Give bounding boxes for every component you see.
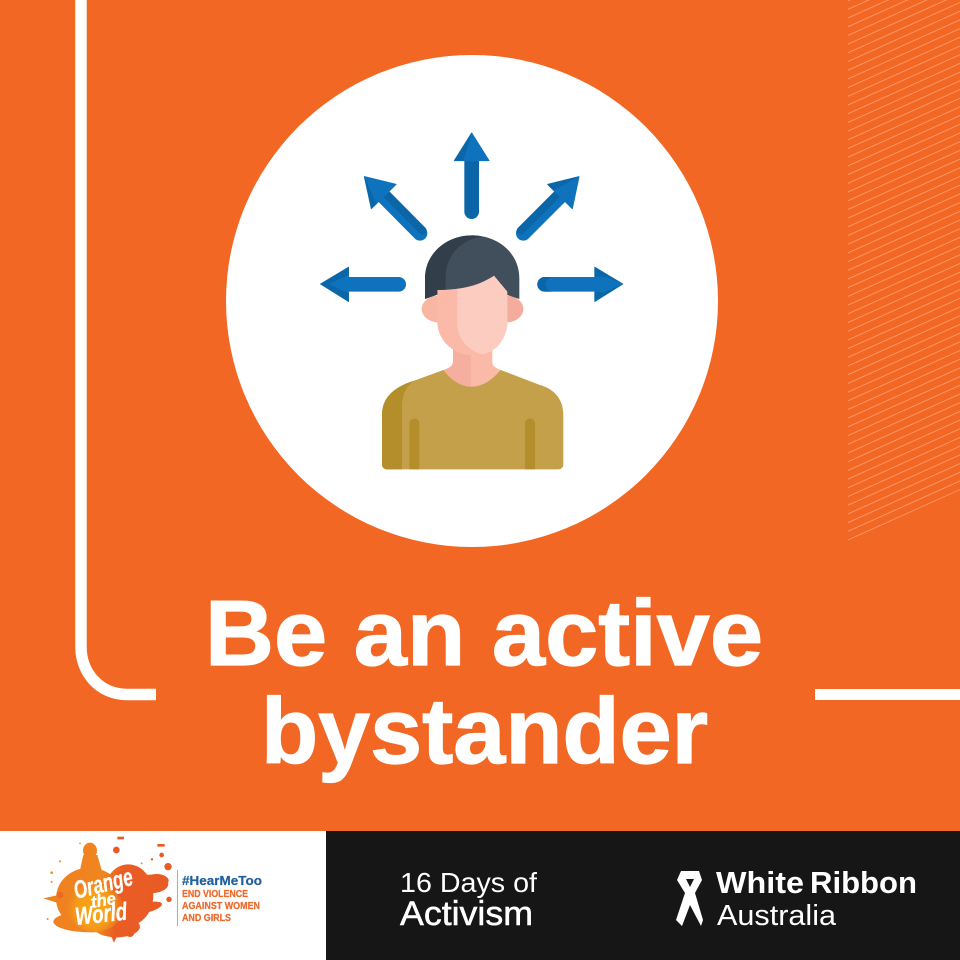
White Ribbon Australia logo [676,865,917,932]
paint splash [43,837,172,943]
icon: white ribbon [676,871,703,926]
campaign text [182,889,260,924]
White Ribbon: Ribbon [810,865,917,900]
white circle [226,55,718,547]
White Ribbon: White [716,865,804,900]
16 Days of: 16 Days of [400,867,537,898]
hashtag: #HearMeToo [182,873,262,888]
campaign text: AND GIRLS [182,913,231,924]
arrow: left [320,267,406,302]
campaign text: AGAINST WOMEN [182,901,260,912]
icon: person with arrows [320,133,623,469]
arrow: upper right [521,177,579,233]
title line 1: Be an active [205,581,763,685]
footer black panel [326,831,960,960]
person: hair [425,235,519,299]
logo lettering [71,863,136,931]
person: face [437,270,507,355]
White Ribbon [716,865,917,900]
white frame line left [81,0,156,694]
arrow: up [454,133,489,219]
arrow: upper left [364,177,423,233]
16 Days of Activism wordmark [400,867,537,933]
title line 2: bystander [261,679,708,783]
logo lettering: World [74,898,129,931]
person: ears [422,296,523,322]
white frame line right [815,689,960,700]
diagonal hatch pattern [848,0,960,541]
person: shirt [382,370,563,469]
logo: Orange the World [43,837,262,943]
title [205,581,763,783]
arrow: right [537,267,623,302]
Activism: Activism [400,895,533,933]
logo lettering: Orange [71,863,136,905]
logo lettering: the [89,889,117,912]
footer white panel [0,831,326,960]
logo divider [177,870,178,926]
Australia: Australia [717,900,837,932]
person: neck [443,347,501,387]
campaign text: END VIOLENCE [182,889,248,900]
